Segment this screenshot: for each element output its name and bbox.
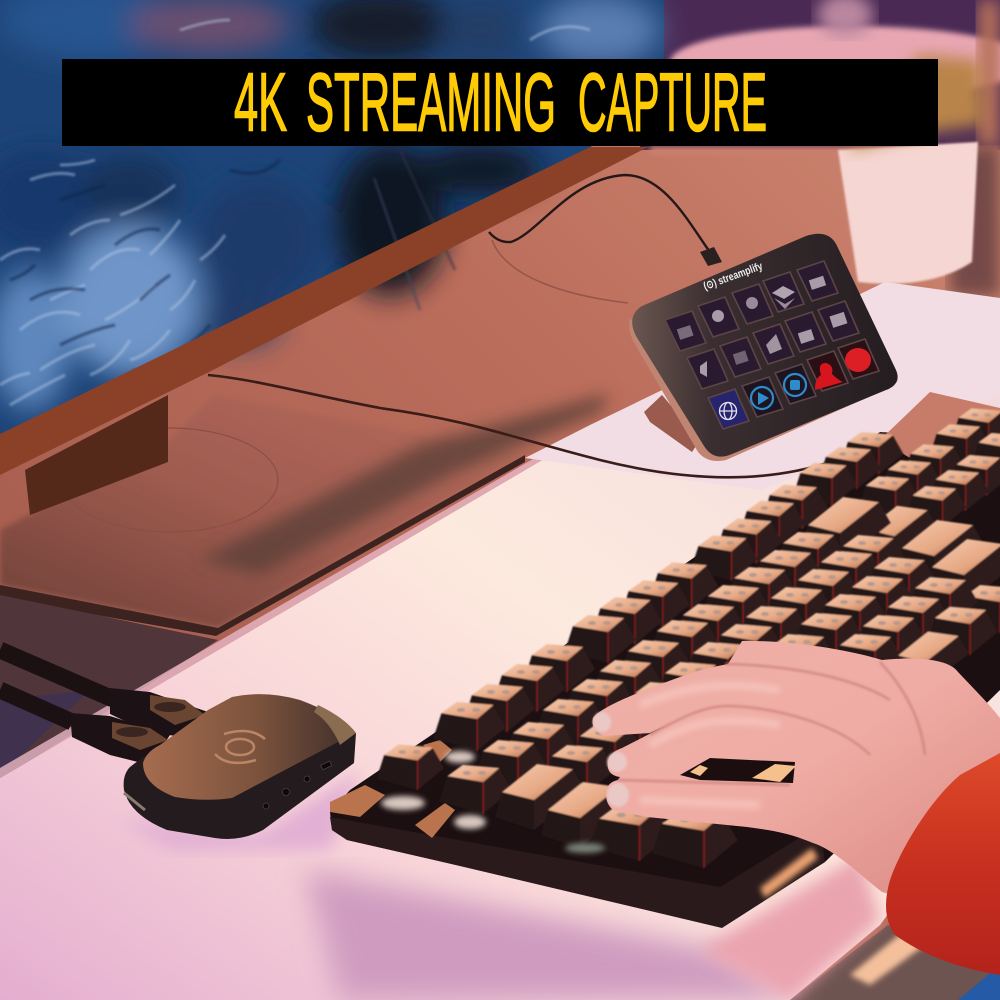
monitor stand base plate bbox=[0, 393, 610, 636]
brand label: (⊙) streamplify bbox=[702, 260, 765, 293]
finger highlights bbox=[640, 686, 780, 805]
play key icon bbox=[751, 387, 773, 409]
keyboard keys fourth row bbox=[495, 539, 1000, 848]
globe key icon bbox=[719, 402, 737, 420]
plant pot bbox=[838, 55, 985, 284]
capture device HDMI cables bbox=[0, 650, 113, 722]
keyboard keys front row bbox=[590, 577, 1000, 868]
gap between fingers bbox=[680, 758, 795, 783]
lower right desk and blue corner bbox=[790, 925, 1000, 1000]
capture logo bbox=[215, 731, 265, 763]
capture device top surface bbox=[143, 694, 355, 800]
keyboard keys second row bbox=[475, 497, 938, 788]
title text: STREAMING bbox=[306, 56, 556, 148]
keyboard switch glow patches bbox=[381, 751, 605, 853]
key icons bbox=[677, 276, 847, 377]
cable shadow bbox=[492, 240, 628, 303]
background: purple wall and pink tray top right bbox=[640, 0, 1000, 156]
hand bbox=[592, 641, 1000, 900]
capture device gold rim bbox=[314, 705, 356, 745]
cable: stream deck USB cable bbox=[489, 175, 712, 255]
monitor bezel bbox=[0, 147, 648, 475]
monitor stand neck bbox=[25, 395, 168, 515]
stream deck stand bbox=[644, 395, 700, 452]
monitor screen bbox=[0, 0, 664, 435]
key grid bbox=[665, 261, 879, 429]
cable: lower cable across desk bbox=[208, 375, 830, 477]
capture ports bbox=[263, 761, 332, 809]
red sleeve bbox=[886, 753, 1000, 975]
stream deck controller bbox=[629, 234, 898, 461]
finger shading bbox=[618, 662, 925, 785]
keyboard keys third row bbox=[439, 520, 985, 814]
keyboard keys far cluster bbox=[859, 408, 1000, 527]
title text: 4K bbox=[234, 56, 287, 148]
stream deck body bbox=[632, 234, 898, 457]
red person key icon bbox=[815, 363, 843, 390]
mat upper region near stream deck bbox=[525, 282, 1000, 490]
capture device body bbox=[124, 733, 356, 839]
capture device HDMI connectors bbox=[70, 688, 208, 765]
stream deck body side bbox=[629, 318, 897, 461]
scene: desk setup illustration with title: CAPTURE bbox=[578, 56, 767, 148]
stop key icon bbox=[784, 374, 806, 396]
capture side slot bbox=[124, 793, 145, 810]
fingernails bbox=[593, 712, 629, 807]
keyboard keys number row bbox=[377, 432, 903, 790]
key glints between fingers bbox=[690, 764, 796, 782]
keyboard base bbox=[330, 392, 1000, 928]
desk mat bbox=[0, 285, 1000, 1000]
dark desk strip beneath stand bbox=[0, 595, 218, 780]
red chat key icon bbox=[845, 348, 871, 372]
keyboard copper plate pieces bbox=[330, 740, 455, 838]
background behind plant pot bbox=[950, 146, 1000, 296]
capture device bbox=[124, 694, 356, 839]
keyboard and capture shadows on mat bbox=[120, 770, 880, 1000]
cable connector bbox=[700, 247, 722, 266]
title banner bbox=[62, 59, 938, 146]
